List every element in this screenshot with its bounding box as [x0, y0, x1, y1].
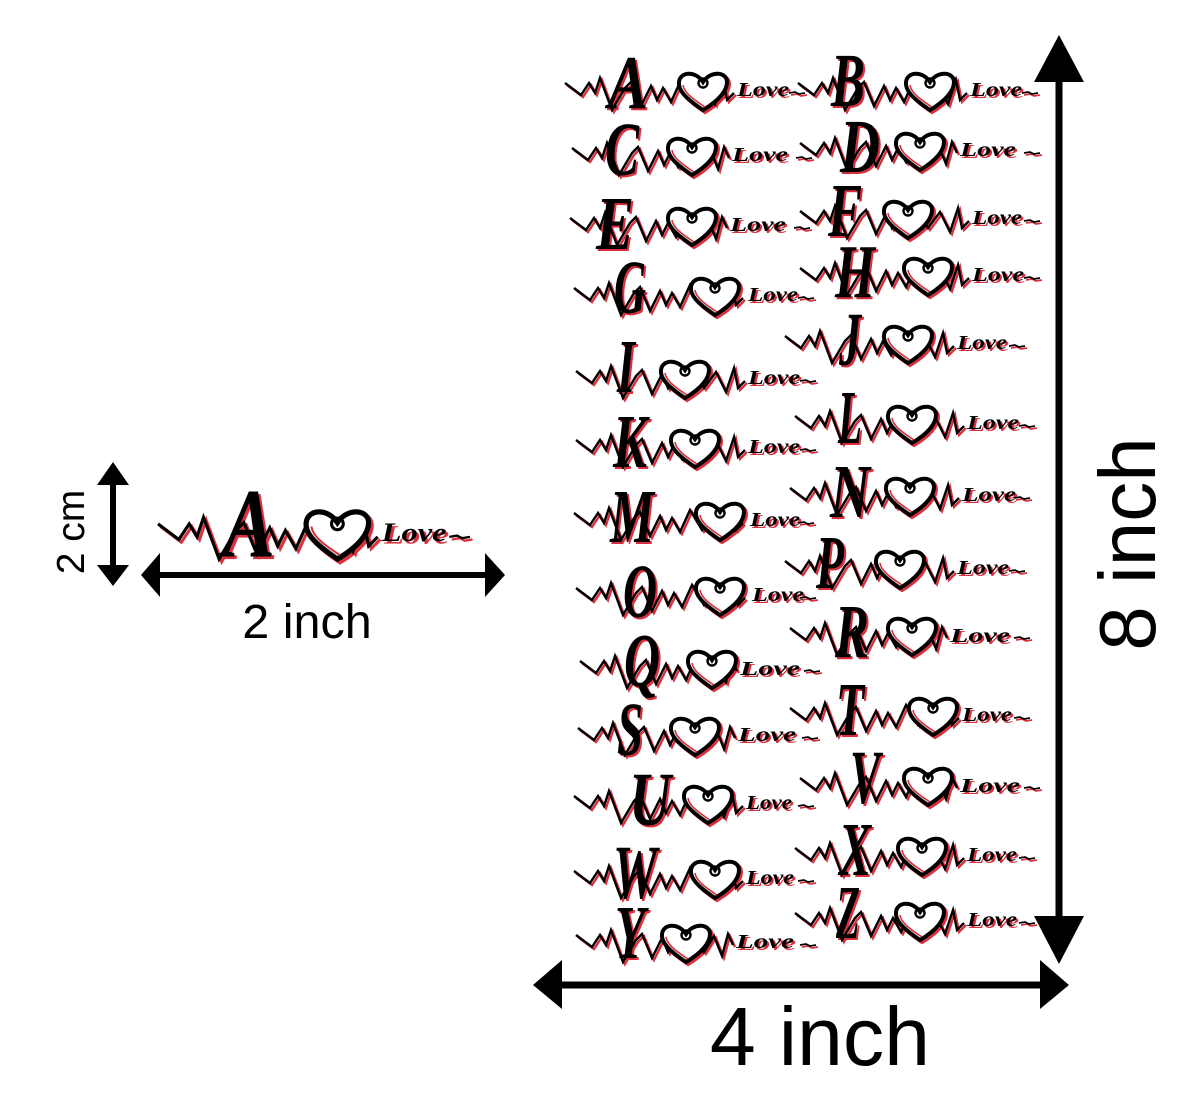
tattoo J [785, 298, 1025, 382]
tattoo G: Love [747, 284, 798, 306]
tattoo U: Love [745, 792, 792, 814]
tattoo L [795, 376, 1035, 460]
tattoo R: R [834, 590, 869, 674]
tattoo A: Love [736, 79, 789, 101]
tattoo I [576, 325, 816, 409]
tattoo N: N [829, 450, 872, 534]
tattoo E: Love [729, 214, 786, 236]
tattoo Y: Love [735, 931, 794, 953]
label: 4 inch: 4 inch [710, 991, 930, 1083]
tattoo I: Love [747, 367, 800, 389]
sample tattoo: letter A: Love [380, 518, 447, 547]
tattoo C: C [605, 108, 640, 192]
tattoo E: E [595, 182, 634, 266]
tattoo L: L [837, 376, 862, 460]
tattoo P: P [815, 521, 844, 605]
tattoo M: Love [749, 509, 800, 531]
tattoo K: K [612, 400, 650, 484]
tattoo H [800, 230, 1040, 314]
label: 8 inch: 8 inch [1083, 437, 1172, 651]
tattoo A [565, 41, 805, 125]
tattoo C: Love [731, 144, 788, 166]
tattoo X [795, 808, 1035, 892]
tattoo P: Love [956, 557, 1009, 579]
tattoo V: Love [958, 775, 1020, 797]
tattoo D [800, 105, 1040, 189]
tattoo J: J [838, 298, 862, 382]
tattoo B [798, 39, 1038, 123]
arrow: 8 inch height [1034, 35, 1084, 964]
tattoo S: Love [737, 724, 796, 746]
tattoo M: M [609, 475, 656, 559]
tattoo K: Love [747, 436, 800, 458]
tattoo O: O [623, 550, 657, 634]
tattoo C [572, 108, 812, 192]
tattoo K [576, 400, 816, 484]
tattoo O [576, 550, 816, 634]
arrow: 2 cm height [97, 462, 129, 586]
tattoo W: Love [745, 867, 794, 889]
tattoo B: Love [969, 79, 1022, 101]
tattoo S: S [617, 688, 643, 772]
tattoo N [790, 450, 1030, 534]
tattoo Y: Y [615, 891, 649, 975]
tattoo W [574, 831, 814, 915]
tattoo A: A [605, 41, 648, 125]
tattoo H: Love [971, 264, 1024, 286]
tattoo O: Love [751, 584, 804, 606]
tattoo G [574, 246, 814, 330]
tattoo L: Love [966, 412, 1019, 434]
tattoo T: T [836, 668, 866, 752]
tattoo S [578, 688, 818, 772]
tattoo Q [580, 619, 820, 703]
tattoo F [800, 169, 1040, 253]
sample tattoo: letter A: A [218, 469, 275, 578]
tattoo N: Love [961, 484, 1016, 506]
tattoo T: Love [961, 704, 1012, 726]
sample tattoo: letter A [158, 469, 470, 578]
tattoo P [785, 521, 1025, 605]
tattoo D: Love [959, 139, 1016, 161]
tattoo V [800, 736, 1040, 820]
tattoo T [790, 668, 1030, 752]
tattoo V: V [850, 736, 883, 820]
tattoo Z: Love [966, 909, 1017, 931]
tattoo H: H [834, 230, 877, 314]
tattoo J: Love [956, 332, 1007, 354]
tattoo D: D [839, 105, 880, 189]
tattoo B: B [830, 39, 865, 123]
label: 2 inch: 2 inch [242, 595, 372, 649]
tattoo X: Love [966, 844, 1017, 866]
tattoo I: I [616, 325, 636, 409]
tattoo sheet: A to Z [565, 39, 1040, 975]
tattoo Z [795, 871, 1035, 955]
tattoo R [790, 590, 1030, 674]
tattoo G: G [614, 246, 646, 330]
tattoo X: X [838, 808, 872, 892]
tattoo W: W [613, 831, 661, 915]
arrow: 2 inch width [141, 553, 505, 597]
tattoo M [574, 475, 814, 559]
tattoo Y [576, 891, 816, 975]
tattoo F: Love [971, 207, 1022, 229]
label: 2 cm: 2 cm [50, 490, 93, 574]
tattoo F: F [827, 169, 862, 253]
tattoo E [570, 182, 810, 266]
tattoo Q: Love [738, 658, 800, 680]
tattoo Q: Q [624, 619, 660, 703]
arrow: 4 inch width [533, 960, 1069, 1009]
tattoo U [574, 758, 814, 842]
tattoo Z: Z [835, 871, 860, 955]
tattoo R: Love [948, 625, 1010, 647]
tattoo U: U [629, 758, 674, 842]
